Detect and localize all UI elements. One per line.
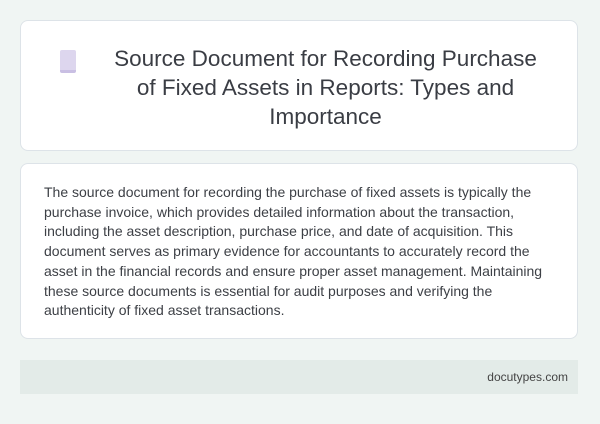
panel: title card: [20, 20, 578, 151]
panel: description: [20, 163, 578, 339]
title: Source Document for Recording Purchase of Fixed Assets in Reports: Types and Importance: [114, 46, 537, 129]
footer text: docutypes.com: [487, 370, 568, 384]
icon: document: [60, 50, 76, 73]
footer: [20, 360, 578, 394]
text block: The source document for recording the purchase of fixed assets is typically the purchase invoice, which provides detailed information about the transaction, including the asset description, purchase price, and date of acquisition. This document serves as primary evidence for accountants to accurately record the asset in the financial records and ensure proper asset management. Maintaining these source documents is essential for audit purposes and verifying the authenticity of fixed asset transactions.: [44, 184, 542, 318]
